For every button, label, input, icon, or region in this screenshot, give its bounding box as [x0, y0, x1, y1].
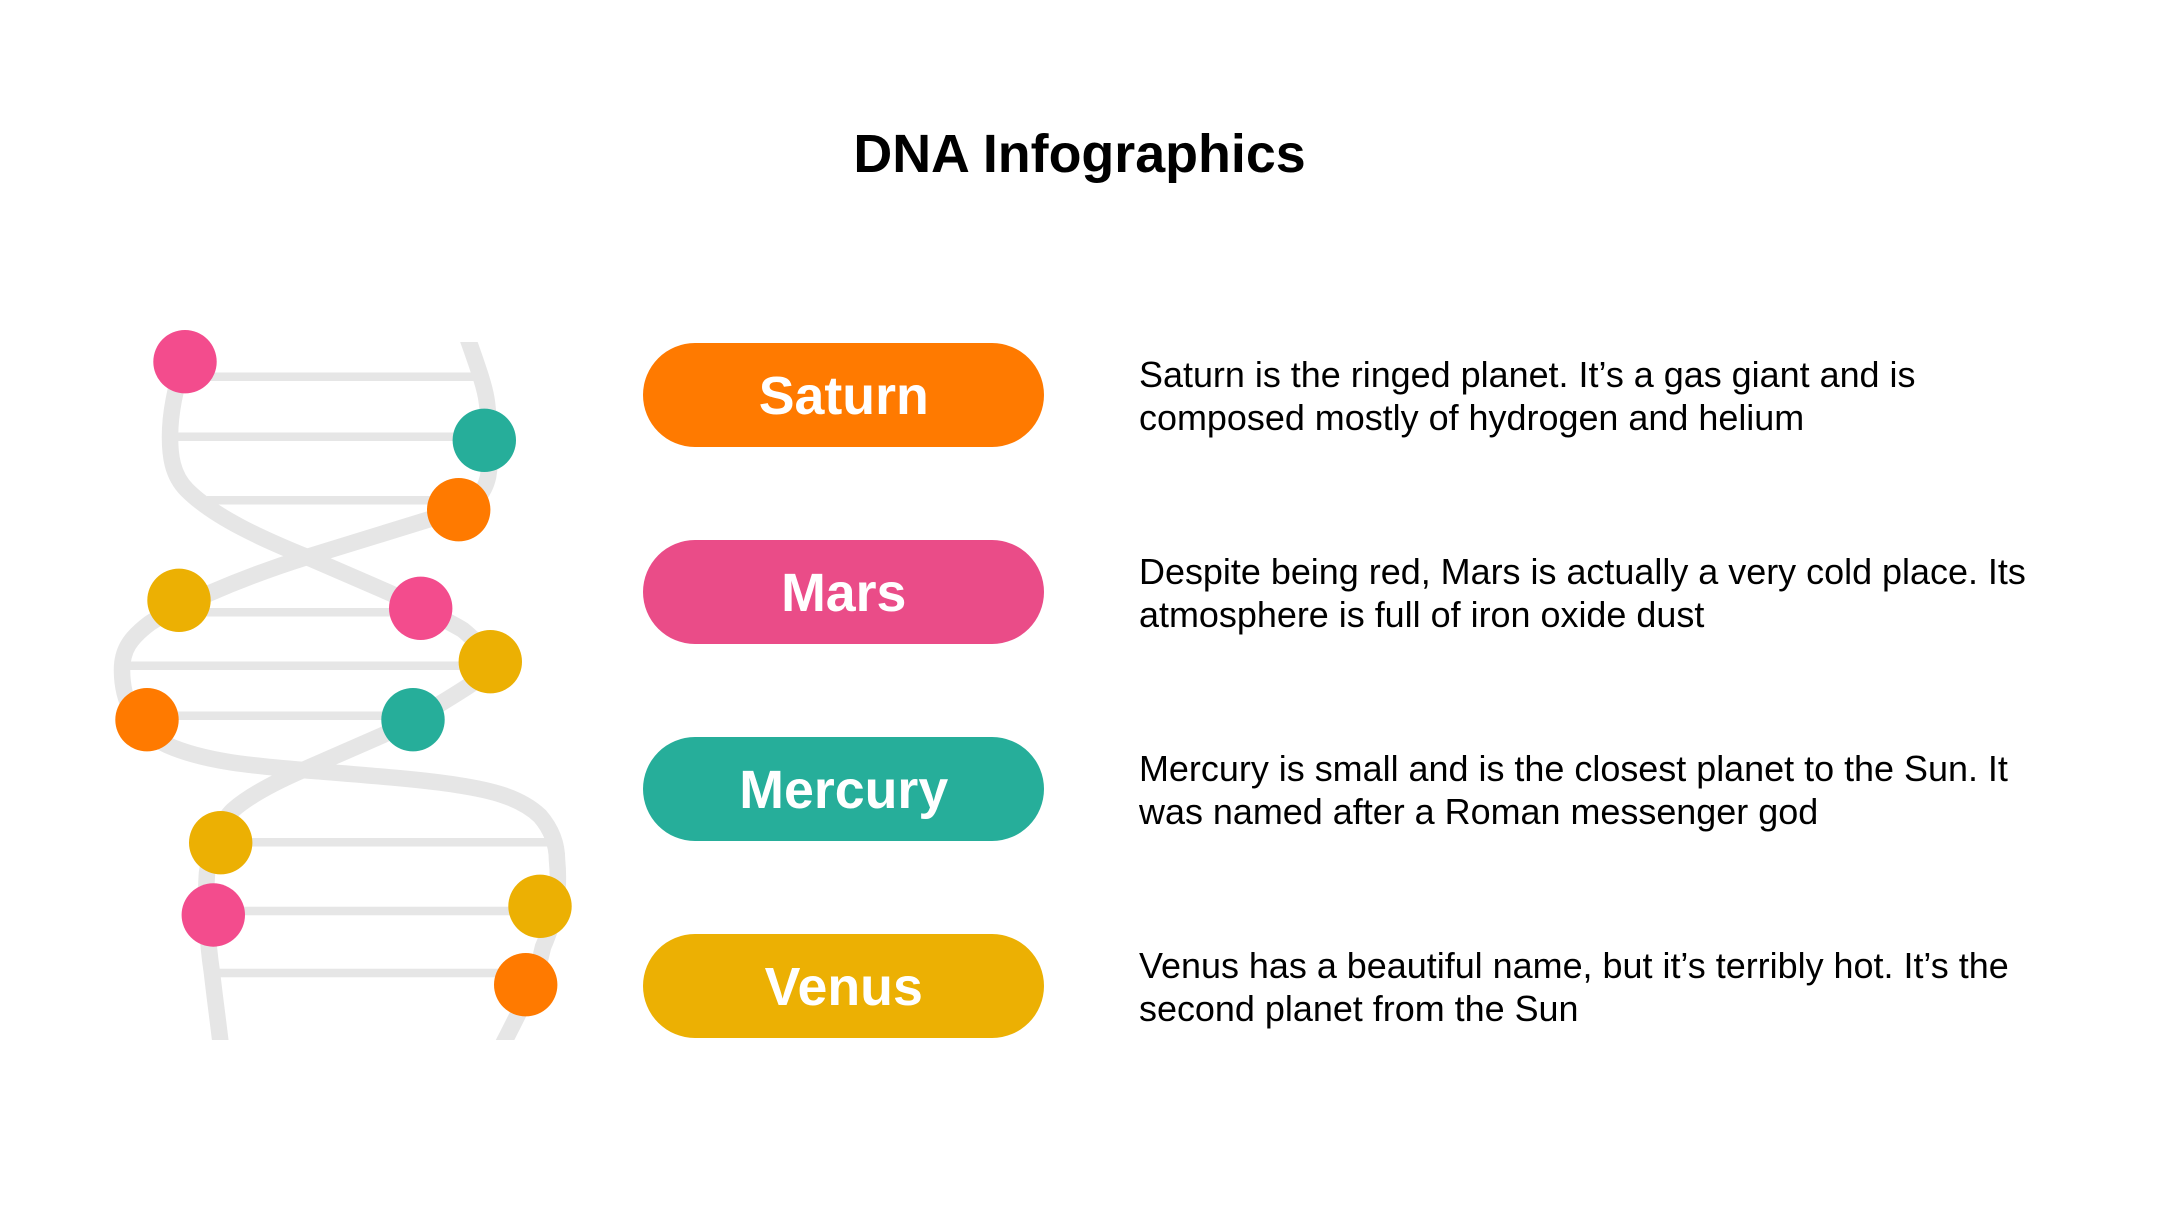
pill: Venus: Venus	[765, 957, 923, 1017]
text: Saturn description: composed mostly of hydrogen and helium	[1139, 397, 1804, 438]
pill: Mercury: Mercury	[739, 760, 948, 820]
pill: Mars: Mars	[781, 563, 906, 623]
text: Saturn description	[1139, 354, 1915, 438]
helix strands and rungs	[122, 325, 558, 1055]
pill: Mars	[643, 540, 1044, 644]
pill: Saturn	[643, 343, 1044, 447]
text: Mars description: atmosphere is full of iron oxide dust	[1139, 594, 1704, 635]
text: Venus description: Venus has a beautiful name, but it’s terribly hot. It’s the	[1139, 945, 2009, 986]
text: Mars description	[1139, 551, 2026, 635]
text: Mercury description: was named after a Roman messenger god	[1139, 791, 1818, 832]
text: Saturn description: Saturn is the ringed planet. It’s a gas giant and is	[1139, 354, 1915, 395]
text: Mercury description	[1139, 748, 2008, 832]
text: Venus description	[1139, 945, 2009, 1029]
DNA nodes	[115, 330, 572, 1016]
text: Mercury description: Mercury is small and is the closest planet to the Sun. It	[1139, 748, 2008, 789]
DNA helix illustration	[114, 330, 572, 1040]
text: Venus description: second planet from the Sun	[1139, 988, 1579, 1029]
text: Mars description: Despite being red, Mars is actually a very cold place. Its	[1139, 551, 2026, 592]
pill: Mercury	[643, 737, 1044, 841]
pill: Saturn: Saturn	[759, 366, 929, 426]
pill: Venus	[643, 934, 1044, 1038]
title: DNA Infographics	[853, 124, 1306, 184]
